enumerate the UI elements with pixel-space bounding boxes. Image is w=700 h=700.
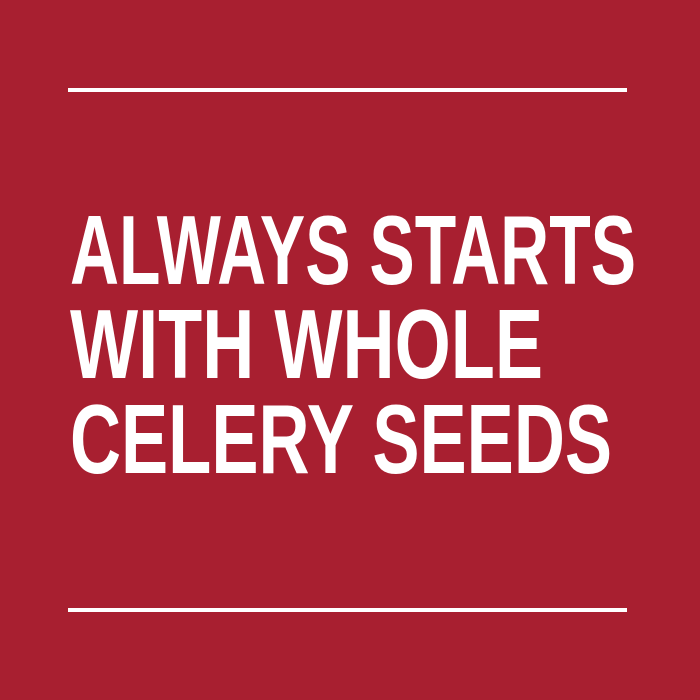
top rule	[68, 88, 627, 92]
headline: WITH WHOLE	[70, 289, 543, 399]
headline	[70, 195, 636, 494]
bottom rule	[68, 608, 627, 612]
